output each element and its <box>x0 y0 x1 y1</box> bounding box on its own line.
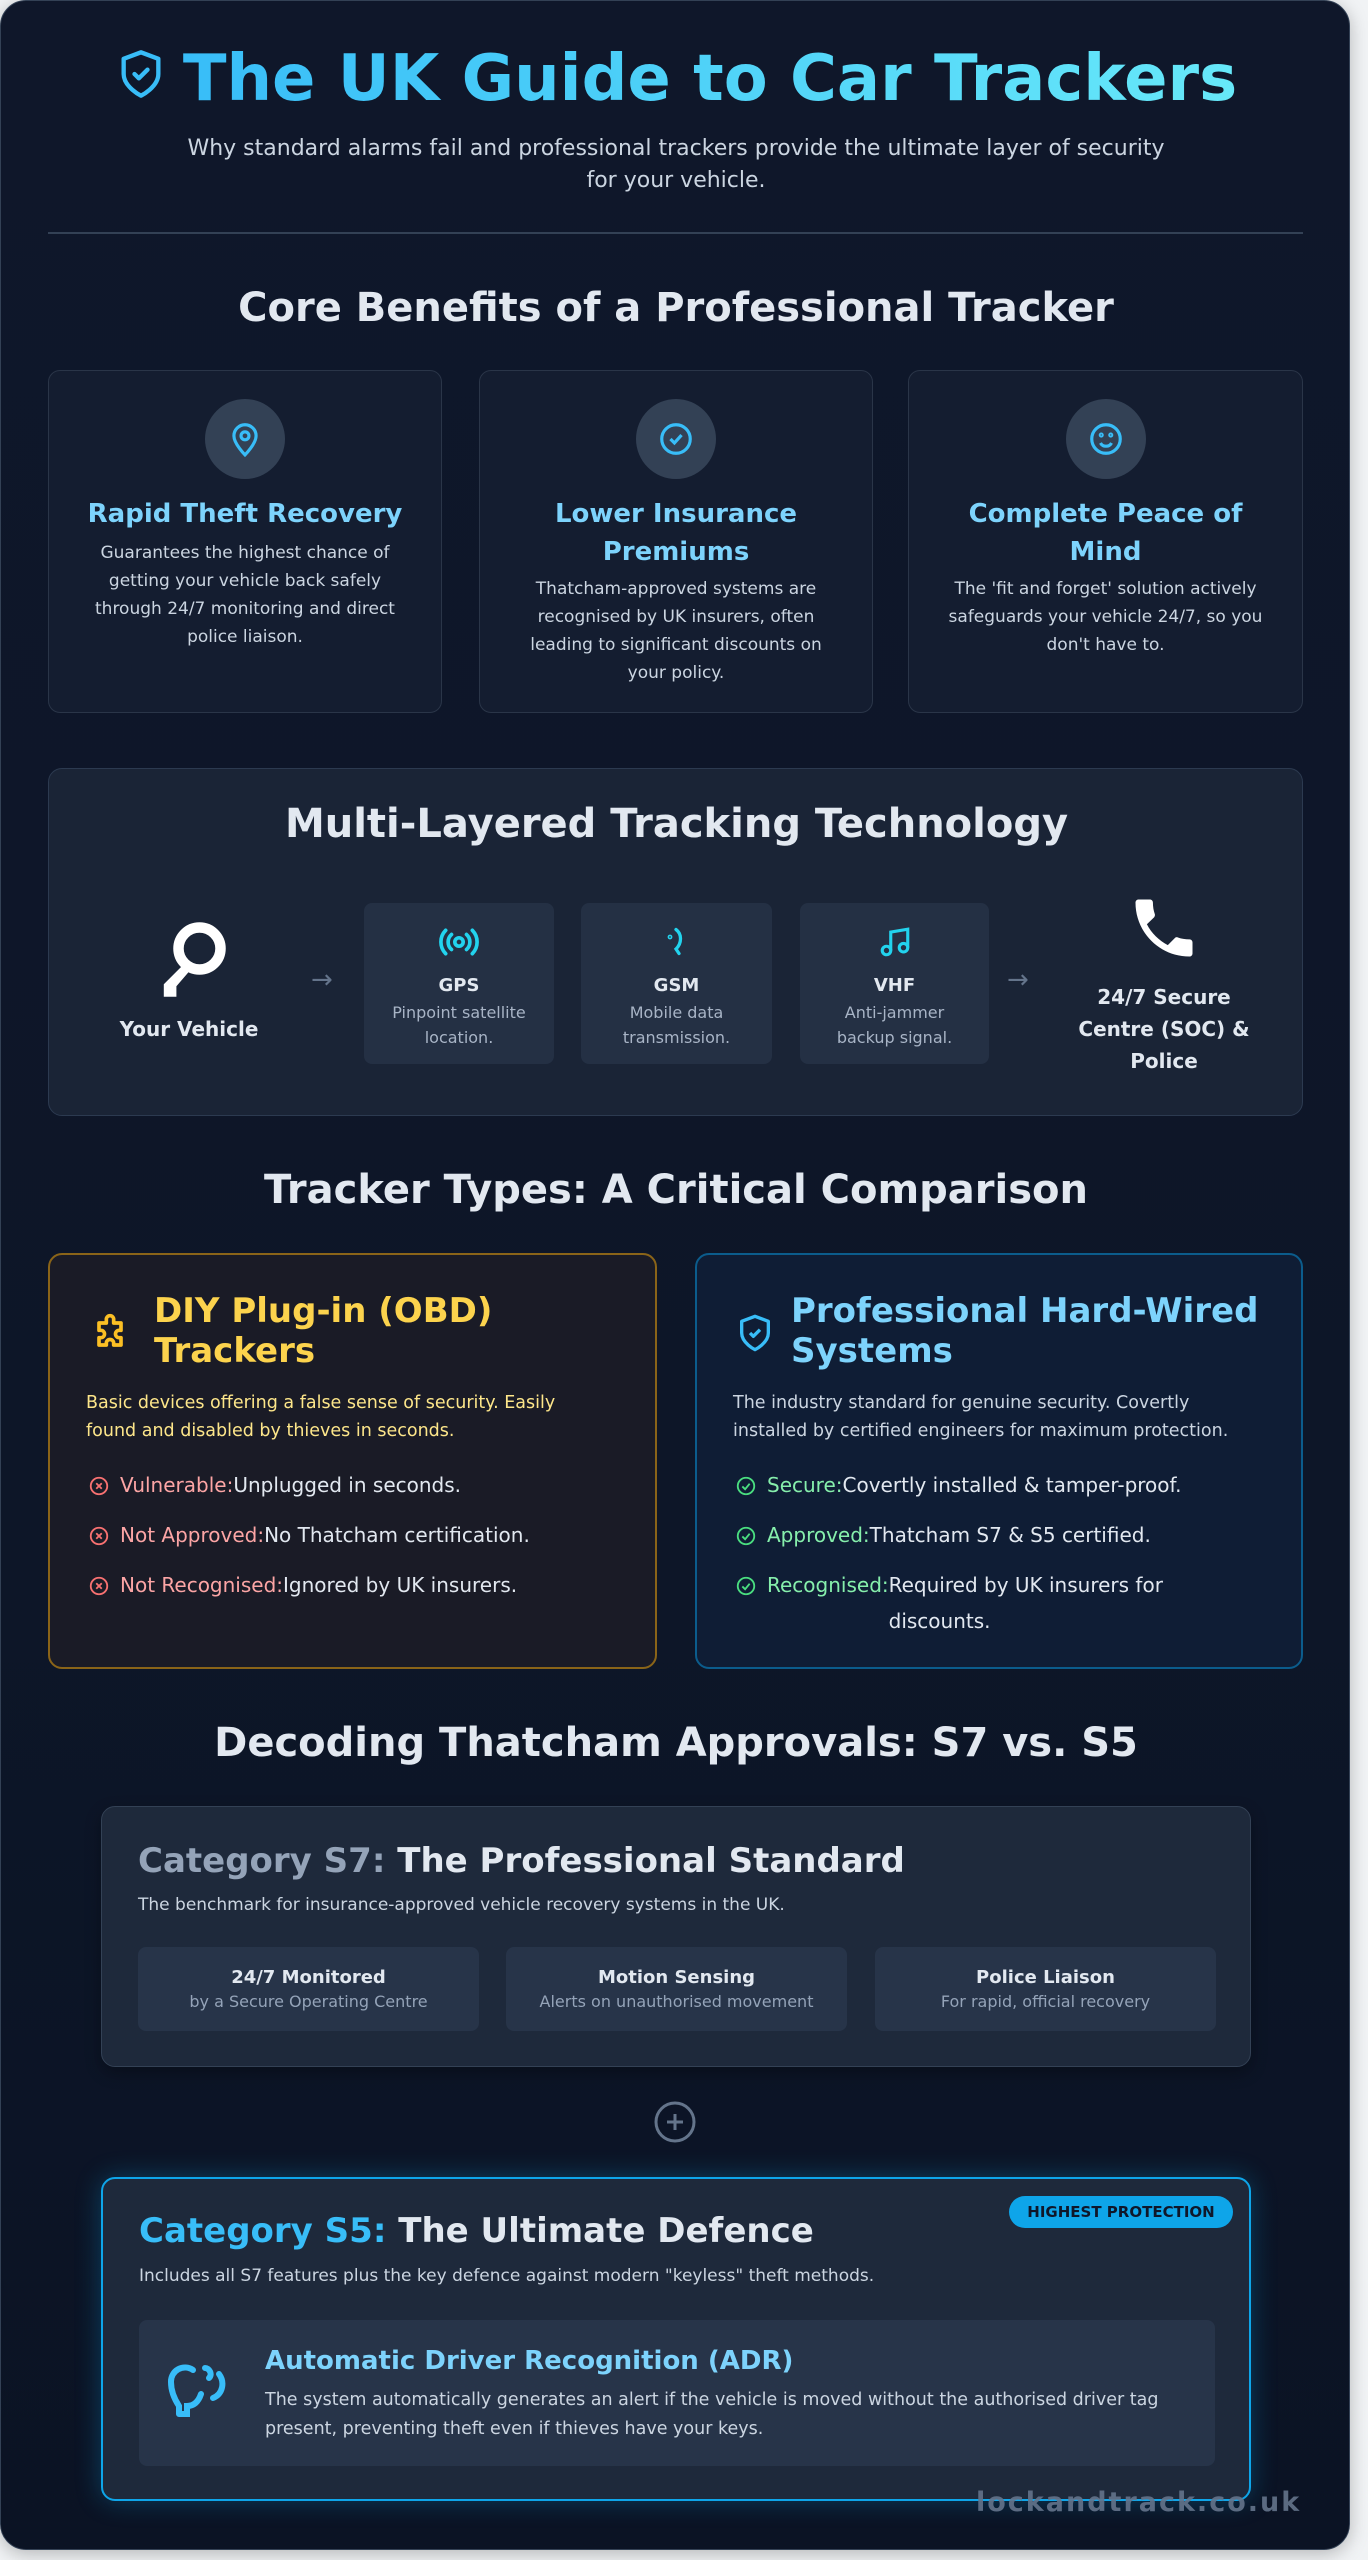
panel: DIY trackers: Basic devices offering a false sense of security. Easily found and disabled by thieves in seconds. <box>86 1393 555 1441</box>
panel: benefit 2: Thatcham-approved systems are recognised by UK insurers, often leading to significant discounts on your policy. <box>530 579 822 683</box>
icon: key / your vehicle <box>120 922 258 1041</box>
sub-box: monitored <box>138 1947 479 2031</box>
panel: benefit 3: The 'fit and forget' solution actively safeguards your vehicle 24/7, so you don't have to. <box>949 579 1262 655</box>
box: GPS: GPS <box>439 975 479 996</box>
box: GPS <box>364 903 554 1064</box>
title: The UK Guide to Car Trackers <box>183 42 1237 116</box>
panel: S7: Category S7: The Professional Standard <box>138 1841 905 1881</box>
arrow: → <box>311 965 333 995</box>
icon: ADR <box>168 2364 226 2417</box>
box: GSM: Mobile data transmission. <box>623 1003 730 1047</box>
icon: smile <box>1066 399 1146 479</box>
box: VHF: Anti-jammer backup signal. <box>837 1003 952 1047</box>
sub-box: police: Police Liaison <box>976 1967 1115 1988</box>
list: Covertly installed & tamper-proof. <box>842 1473 1181 1497</box>
heading: core benefits: Core Benefits of a Professional Tracker <box>238 285 1114 331</box>
ADR box: Automatic Driver Recognition (ADR) <box>265 2346 793 2376</box>
icon: key / your vehicle: Your Vehicle <box>120 1017 258 1041</box>
sub-box: motion: Motion Sensing <box>598 1967 755 1988</box>
box: VHF <box>800 903 989 1064</box>
panel: benefit 1 <box>48 370 442 713</box>
list: Vulnerable:Unplugged in seconds. <box>120 1473 461 1497</box>
panel: S7: The benchmark for insurance-approved vehicle recovery systems in the UK. <box>138 1895 785 1915</box>
sub-box: monitored: by a Secure Operating Centre <box>189 1992 428 2011</box>
panel: benefit 1: Guarantees the highest chance of getting your vehicle back safely through 24/7 monitoring and direct police liaison. <box>95 543 395 647</box>
box: GSM: GSM <box>654 975 699 996</box>
sub-box: police: For rapid, official recovery <box>941 1992 1150 2011</box>
heading: DIY Plug-in (OBD) Trackers <box>154 1291 492 1371</box>
icon: puzzle <box>97 1314 123 1347</box>
panel: benefit 1: Rapid Theft Recovery <box>88 499 402 529</box>
panel: DIY trackers: Not Recognised:Ignored by UK insurers. <box>120 1573 517 1597</box>
list: Secure: <box>767 1473 842 1497</box>
panel: S5 <box>101 2177 1251 2501</box>
panel: DIY trackers: Not Approved:No Thatcham certification. <box>120 1523 530 1547</box>
heading: Multi-Layered Tracking Technology <box>285 801 1068 847</box>
sub-box: motion: Alerts on unauthorised movement <box>540 1992 813 2011</box>
subtitle: Why standard alarms fail and professional trackers provide the ultimate layer of security for your vehicle. <box>187 136 1165 193</box>
badge <box>1009 2196 1233 2228</box>
panel: benefit 3: Complete Peace of Mind <box>969 499 1242 567</box>
panel: S5: Category S5: The Ultimate Defence <box>139 2211 814 2251</box>
heading: thatcham: Decoding Thatcham Approvals: S7 vs. S5 <box>214 1720 1138 1766</box>
panel: benefit 2 <box>479 370 873 713</box>
box: GPS: Pinpoint satellite location. <box>392 1003 526 1047</box>
watermark: lockandtrack.co.uk <box>976 2487 1301 2518</box>
icon: shield <box>122 50 160 98</box>
icon: plus <box>654 2102 696 2142</box>
panel: professional systems: Required by UK insurers for discounts. <box>889 1573 1163 1633</box>
arrow: → <box>1007 965 1029 995</box>
panel: DIY trackers <box>48 1253 657 1669</box>
icon: phone / SOC <box>1078 900 1250 1073</box>
ADR box: The system automatically generates an alert if the vehicle is moved without the authorised driver tag present, preventing theft even if thieves have your keys. <box>265 2390 1158 2439</box>
panel: professional systems: Thatcham S7 & S5 certified. <box>870 1523 1151 1547</box>
panel: S7 <box>101 1806 1251 2067</box>
panel: professional systems: The industry standard for genuine security. Covertly installed by certified engineers for maximum protection. <box>733 1393 1228 1441</box>
panel: S5: Includes all S7 features plus the key defence against modern "keyless" theft methods. <box>139 2266 874 2286</box>
icon: check circle <box>636 399 716 479</box>
panel: tracking technology <box>48 768 1303 1116</box>
panel: professional systems: Recognised: <box>767 1573 889 1597</box>
box: VHF: VHF <box>874 975 915 996</box>
icon: location pin <box>205 399 285 479</box>
panel: professional systems <box>695 1253 1303 1669</box>
heading: Professional Hard-Wired Systems <box>791 1291 1258 1371</box>
panel: benefit 2: Lower Insurance Premiums <box>555 499 797 567</box>
box: GSM <box>581 903 772 1064</box>
panel: professional systems: Approved: <box>767 1523 870 1547</box>
icon: shield <box>740 1314 770 1352</box>
badge: HIGHEST PROTECTION <box>1027 2203 1215 2221</box>
sub-box: monitored: 24/7 Monitored <box>231 1967 386 1988</box>
icon: phone / SOC: 24/7 Secure Centre (SOC) & Police <box>1078 985 1250 1073</box>
sub-box: motion <box>506 1947 847 2031</box>
sub-box: police <box>875 1947 1216 2031</box>
heading: tracker types: Tracker Types: A Critical Comparison <box>264 1167 1088 1213</box>
panel: benefit 3 <box>908 370 1303 713</box>
ADR box <box>139 2320 1215 2466</box>
